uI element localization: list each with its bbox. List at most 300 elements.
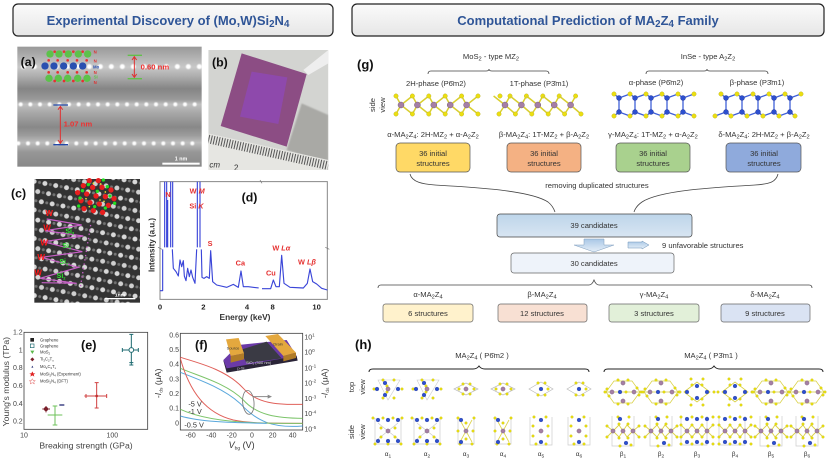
crystal: 1T — [494, 94, 583, 116]
combination formulas: 4 — [634, 134, 637, 140]
left ticks: 0 — [175, 420, 179, 427]
unfavorable text: 9 unfavorable structures — [662, 241, 744, 250]
device inset: (300 nm) — [254, 360, 272, 365]
family labels: Z — [435, 290, 440, 299]
family labels: 2 — [769, 294, 772, 300]
bright atom rows — [18, 67, 200, 143]
W / Si overlay: Si — [65, 228, 72, 235]
legend — [29, 337, 81, 385]
W / Si overlay: W — [43, 224, 51, 233]
axis labels: 4 — [245, 302, 250, 311]
W / Si overlay: W — [45, 209, 53, 218]
combination formulas: Z — [690, 130, 695, 139]
family labels: 4 — [665, 294, 668, 300]
box: 12 structures: 12 structures — [520, 309, 564, 318]
label e: (e) — [81, 338, 96, 352]
box: 36 initial alpha: structures — [416, 159, 450, 168]
data: Ti3C2Tx — [42, 406, 50, 412]
box: 36 initial beta — [507, 143, 581, 172]
header: experimental discovery: 2 — [269, 19, 275, 30]
alpha labels: α — [463, 451, 467, 458]
legend: Mo — [40, 364, 46, 369]
tick labels — [13, 330, 23, 426]
legend: MoSi — [40, 371, 49, 376]
legend: (Experiment) — [56, 371, 81, 376]
combination formulas: + β-A — [778, 130, 800, 139]
phase labels — [406, 78, 785, 88]
W / Si overlay: 2 — [63, 275, 66, 280]
view labels: top — [347, 382, 356, 392]
measure 1.07 nm: 1.07 nm — [64, 119, 92, 128]
box: 3 structures: 3 structures — [634, 309, 674, 318]
phase labels: 1T-phase (P3̄m1) — [510, 79, 569, 88]
ruler: 2 — [234, 164, 239, 173]
label d: (d) — [242, 191, 257, 205]
brace InSe — [646, 69, 768, 74]
brace MoS2 — [428, 69, 549, 74]
heading P-6m2: MA — [455, 351, 467, 360]
panel d: EDS spectrum: Energy (keV) — [220, 312, 271, 322]
box: 36 initial gamma — [616, 143, 690, 172]
ellipse and arrow — [242, 390, 272, 415]
data: Mo2C2Tx — [59, 403, 64, 407]
W / Si overlay: W — [37, 253, 45, 262]
bottom ticks: -60 — [186, 432, 196, 439]
left ticks: 0.5 — [169, 347, 179, 354]
combination formulas: 2 — [626, 134, 629, 140]
spectrum trace — [160, 182, 327, 291]
axis labels: 2 — [201, 302, 205, 311]
combination formulas: δ-MA — [718, 130, 736, 139]
header: computational prediction: 2 — [655, 19, 661, 30]
alpha labels: 6 — [580, 454, 583, 460]
axis labels: 8 — [271, 302, 276, 311]
box: 36 initial gamma: 36 initial — [639, 149, 667, 158]
bottom ticks: 0 — [250, 432, 254, 439]
alpha labels — [385, 451, 583, 460]
combination formulas: Z — [409, 130, 414, 139]
box: 30 candidates: 30 candidates — [570, 259, 618, 268]
right ticks: 10 — [304, 350, 312, 357]
box: 36 initial beta: 36 initial — [530, 149, 558, 158]
axis titles: (μA) — [153, 368, 163, 388]
alpha labels: α — [500, 451, 504, 458]
box: 36 initial delta: 36 initial — [750, 149, 778, 158]
combination formulas: + α-A — [447, 130, 469, 139]
panel e: modulus chart: Young's modulus (TPa) — [1, 337, 11, 426]
brace P-3m1 — [604, 366, 823, 372]
right ticks: 10 — [304, 396, 312, 403]
header: computational prediction: 4 — [669, 19, 675, 30]
beta labels: 5 — [772, 454, 775, 460]
atom model overlay: N — [94, 58, 97, 63]
legend: 2 — [49, 381, 51, 385]
combination formulas: 2 — [586, 134, 589, 140]
family labels: Z — [549, 290, 554, 299]
data: MoS2 — [48, 406, 62, 425]
removing duplicates text: removing duplicated structures — [545, 181, 649, 190]
panel f: transfer curves: V — [229, 440, 236, 450]
alpha top views — [373, 379, 591, 400]
scale bar: 1nm — [115, 292, 126, 298]
plot frame — [160, 182, 327, 299]
panel f: transfer curves: ds — [325, 387, 331, 393]
side view label: view — [378, 97, 387, 113]
right ticks: -2 — [312, 379, 317, 384]
curves — [180, 357, 303, 426]
box: 6 structures: 6 structures — [408, 309, 448, 318]
curve labels: -5 V — [188, 400, 202, 409]
combination formulas: : 2H-MZ — [747, 130, 775, 139]
heading P-3m1: 2 — [696, 356, 699, 362]
header: experimental discovery: Experimental Discovery of (Mo,W)Si — [47, 13, 269, 28]
combination formulas: Z — [471, 130, 476, 139]
combination formulas: : 1T-MZ — [528, 130, 555, 139]
InSe type heading: 2 — [732, 56, 735, 62]
left ticks: 0.2 — [169, 391, 179, 398]
panel f: transfer curves: (μA) — [320, 368, 330, 388]
right ticks: 10 — [304, 380, 312, 387]
view labels: side — [347, 425, 356, 439]
brace P-6m2 — [369, 366, 589, 372]
legend: 2 — [49, 373, 51, 377]
panel d: EDS spectrum — [147, 180, 329, 322]
panel e: modulus chart: Breaking strength (GPa) — [39, 441, 133, 451]
right ticks: -1 — [312, 364, 317, 369]
right ticks: 0 — [312, 348, 315, 353]
bottom ticks — [186, 432, 297, 439]
W / Si overlay: 2 — [69, 245, 72, 250]
alpha labels: 1 — [389, 454, 392, 460]
crystal: beta InSe — [713, 92, 803, 118]
panel h — [347, 337, 826, 460]
left ticks — [169, 332, 179, 427]
header: computational prediction — [352, 4, 824, 36]
panel c: atomic image — [11, 178, 140, 303]
box: 30 candidates — [511, 253, 674, 273]
alpha side views — [372, 416, 590, 445]
W / Si overlay: Si — [62, 243, 69, 250]
combination formulas: + α-A — [666, 130, 688, 139]
combination formulas: Z — [581, 130, 586, 139]
device inset: Drain — [273, 341, 283, 346]
combination formulas: 2 — [554, 134, 558, 140]
panel f: transfer curves: bg — [235, 445, 240, 451]
InSe type heading: 2 — [724, 56, 727, 62]
right ticks: -3 — [312, 394, 317, 399]
box: 39 candidates — [497, 214, 692, 237]
phase labels: 2H-phase (P6̄m2) — [406, 79, 466, 88]
curve labels: -0.5 V — [184, 421, 204, 430]
heading P-3m1: ( P3̄m1 ) — [707, 351, 738, 360]
combination formulas: 2 — [578, 134, 581, 140]
measure 0.60 nm: 0.60 nm — [141, 63, 169, 72]
heading P-6m2: 2 — [467, 356, 470, 362]
beta labels: 3 — [698, 454, 701, 460]
right ticks: 10 — [304, 411, 312, 418]
W / Si overlay: W — [40, 238, 48, 247]
box: 36 initial alpha — [396, 143, 470, 172]
right ticks: 10 — [304, 334, 312, 341]
beta labels: β — [804, 451, 808, 458]
family labels: Z — [772, 290, 777, 299]
heading P-6m2: ( P6̄m2 ) — [478, 351, 509, 360]
scale bar — [162, 157, 200, 165]
W / Si overlay: Si — [57, 273, 63, 280]
family labels: δ-MA — [750, 290, 769, 299]
arrow down — [574, 239, 614, 252]
peak labels: Cu — [266, 268, 276, 277]
heading P-3m1: 4 — [703, 356, 707, 362]
tick labels: 0.2 — [13, 419, 23, 426]
phase labels: α-phase (P6̄m2) — [629, 78, 684, 87]
legend: T — [50, 357, 53, 362]
box: 36 initial alpha: 36 initial — [419, 149, 447, 158]
axis labels: 0 — [158, 302, 162, 311]
tick labels: 0.6 — [13, 383, 23, 390]
legend: 4 — [54, 381, 56, 385]
header: computational prediction: Z — [661, 13, 669, 28]
panel d: EDS spectrum: Intensity (a.u.) — [147, 218, 156, 272]
box: 36 initial delta — [726, 143, 801, 172]
combination formulas: β-MA — [499, 130, 517, 139]
family labels: β-MA — [527, 290, 546, 299]
peak labels: W Lα — [272, 243, 291, 252]
combination formulas: 2 — [663, 134, 666, 140]
legend: 2 — [46, 366, 48, 370]
combination formulas: 2 — [476, 134, 479, 140]
family labels: 2 — [546, 294, 549, 300]
view labels — [347, 379, 367, 440]
beta labels: 2 — [662, 454, 665, 460]
axis labels: 10 — [312, 302, 321, 311]
box: 12 structures — [498, 304, 587, 322]
combination formulas: Z — [740, 130, 745, 139]
beta labels: 1 — [624, 454, 627, 460]
combination formulas: 4 — [413, 134, 417, 140]
tick labels: 0.4 — [13, 401, 23, 408]
data: MoSi2N4 — [84, 383, 107, 408]
legend: 4 — [54, 373, 56, 377]
atom model overlay: Mo — [93, 65, 100, 70]
heading P-6m2: Z — [470, 351, 475, 360]
MoS2 type heading: 2 — [479, 56, 482, 62]
legend: C — [47, 364, 50, 369]
right ticks: 1 — [312, 333, 315, 338]
panel b: sample photograph — [208, 50, 328, 173]
combination formulas: Z — [802, 130, 807, 139]
alpha labels: 2 — [428, 454, 431, 460]
beta top views — [604, 378, 826, 406]
panel e: modulus chart: 100 — [107, 432, 118, 439]
combination formulas: 2 — [406, 134, 409, 140]
axis titles: -I — [153, 393, 163, 398]
combination formulas: 2 — [695, 134, 698, 140]
family labels: 2 — [432, 294, 435, 300]
side view label — [368, 97, 387, 113]
box: 36 initial gamma: structures — [636, 159, 670, 168]
device inset — [223, 334, 298, 373]
label g: (g) — [357, 57, 374, 72]
combination formulas: 2 — [517, 134, 520, 140]
left ticks: 0.1 — [169, 406, 179, 413]
legend: 2 — [49, 352, 51, 356]
legend: N — [51, 371, 54, 376]
W / Si overlay: W — [34, 268, 42, 277]
legend: 3 — [43, 359, 45, 363]
device inset: p-Si — [237, 365, 245, 370]
purple wafer — [221, 53, 307, 147]
legend: 2 — [50, 366, 52, 370]
W / Si overlay: Si — [59, 259, 66, 266]
legend: x — [52, 359, 54, 363]
right ticks — [304, 333, 317, 434]
peak labels — [165, 187, 316, 277]
crystal: 2H — [394, 94, 480, 116]
peak labels: W M — [190, 187, 206, 196]
legend: MoSi — [40, 379, 49, 384]
tick labels: 0.8 — [13, 365, 23, 372]
panel e: modulus chart — [1, 330, 148, 451]
axis titles: ds — [158, 387, 164, 393]
arrow right — [628, 241, 649, 249]
side view label: side — [368, 98, 377, 112]
label c: (c) — [11, 187, 26, 201]
combination formulas: 2 — [806, 134, 810, 140]
combination formulas: Z — [520, 130, 525, 139]
axis labels — [158, 302, 321, 311]
device inset: 2 — [253, 362, 255, 366]
peak labels: W Lβ — [298, 258, 316, 267]
crystal: alpha InSe — [612, 92, 696, 118]
legend: x — [55, 366, 57, 370]
legend: MoS — [40, 350, 49, 355]
W / Si overlay: 3 — [72, 231, 75, 236]
measure 1.07 nm — [53, 105, 92, 145]
peak labels: S — [208, 239, 213, 248]
alpha labels: 5 — [542, 454, 545, 460]
combination formulas: γ-MA — [608, 130, 626, 139]
right ticks: -4 — [312, 409, 317, 414]
label h: (h) — [355, 337, 372, 352]
peak labels: Si K — [189, 201, 204, 210]
right ticks: -5 — [312, 425, 317, 430]
view labels: view — [358, 424, 367, 440]
data: graphene — [122, 334, 138, 365]
label b: (b) — [212, 56, 228, 70]
merge curves — [410, 174, 778, 212]
view labels: view — [358, 379, 367, 395]
family labels: 4 — [553, 294, 557, 300]
combination formulas: Z — [629, 130, 634, 139]
legend: C — [45, 357, 48, 362]
bottom ticks: -40 — [206, 432, 216, 439]
peak labels: Ca — [236, 259, 246, 268]
beta labels: 4 — [736, 454, 739, 460]
family labels — [413, 290, 780, 300]
alpha labels: 3 — [467, 454, 470, 460]
beta labels: β — [658, 451, 662, 458]
curve labels: -1 V — [188, 407, 202, 416]
left ticks: 0.6 — [169, 332, 179, 339]
combination formulas: 2 — [687, 134, 690, 140]
InSe type heading: Z — [727, 52, 732, 61]
combination formulas: 2 — [444, 134, 447, 140]
MoS2 type heading: 2 — [516, 56, 519, 62]
shadow — [287, 103, 328, 163]
right ticks: 10 — [304, 427, 312, 434]
box: 39 candidates: 39 candidates — [570, 221, 618, 230]
beta labels: β — [768, 451, 772, 458]
box: 36 initial delta: structures — [747, 159, 781, 168]
combination formulas: : 1T-MZ — [637, 130, 663, 139]
right ticks: 10 — [304, 365, 312, 372]
beta labels: β — [694, 451, 698, 458]
device inset: Source — [227, 345, 240, 350]
left ticks: 0.3 — [169, 376, 179, 383]
combination formulas: 2 — [736, 134, 740, 140]
legend: 2 — [48, 359, 50, 363]
combination formulas — [387, 130, 810, 140]
bottom ticks: -20 — [227, 432, 237, 439]
legend: (DFT) — [56, 379, 68, 384]
header: computational prediction: Computational Prediction of MA — [457, 13, 655, 28]
header: experimental discovery: 4 — [284, 19, 290, 30]
peak labels: N — [165, 190, 171, 199]
alpha labels: α — [385, 451, 389, 458]
family labels: 4 — [439, 294, 443, 300]
tick labels: 1.2 — [13, 330, 23, 337]
device inset: SiO — [246, 360, 253, 365]
panel e: modulus chart: 10 — [20, 432, 28, 439]
beta labels: β — [620, 451, 624, 458]
panel f: transfer curves: -I — [320, 393, 330, 398]
panel g — [357, 52, 812, 322]
box: 9 structures: 9 structures — [745, 309, 785, 318]
W / Si overlay: 2 — [66, 261, 69, 266]
deposited film — [240, 72, 287, 124]
ruler: cm — [209, 161, 220, 170]
alpha labels: α — [424, 451, 428, 458]
panel a: STEM cross-section image — [17, 47, 202, 167]
bottom ticks: 40 — [289, 432, 297, 439]
combination formulas: 2 — [799, 134, 802, 140]
combination formulas: 2 — [468, 134, 471, 140]
atom model overlay: N — [94, 80, 97, 85]
brace lower — [378, 280, 812, 288]
combination formulas: + β-A — [558, 130, 579, 139]
legend: Graphene — [40, 337, 59, 342]
heading P-6m2: 4 — [474, 356, 478, 362]
tick labels: 1 — [19, 347, 23, 354]
beta labels — [620, 451, 811, 460]
scale bar: 1 nm — [175, 157, 187, 163]
legend: T — [52, 364, 55, 369]
header: experimental discovery — [13, 4, 333, 36]
atom model overlay: N — [94, 49, 97, 54]
legend: N — [51, 379, 54, 384]
combination formulas: : 2H-MZ — [417, 130, 444, 139]
legend: Ti — [40, 357, 43, 362]
alpha labels: 4 — [504, 454, 507, 460]
panel f: transfer curves: (V) — [240, 440, 255, 450]
left ticks: 0.4 — [169, 362, 179, 369]
InSe type heading: InSe - type A — [681, 52, 724, 61]
legend: Graphene — [40, 343, 59, 348]
family labels: α-MA — [413, 290, 432, 299]
heading P-3m1: MA — [684, 351, 696, 360]
W / Si overlay — [34, 209, 91, 289]
